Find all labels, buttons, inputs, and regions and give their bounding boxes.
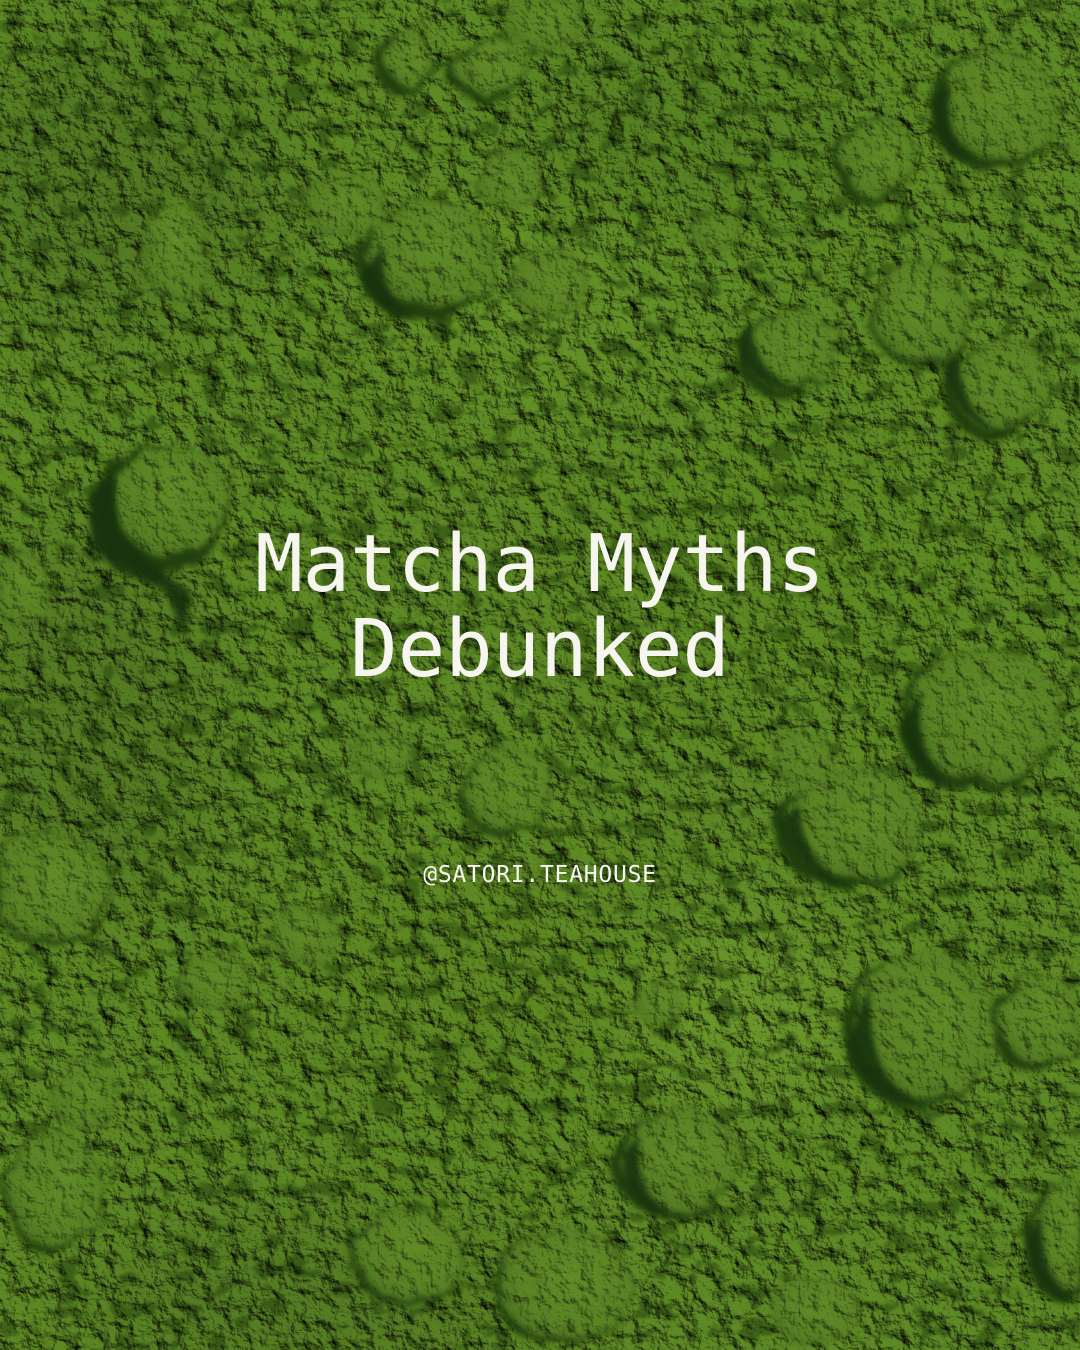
handle: @SATORI.TEAHOUSE: [423, 862, 657, 888]
title line 1: Matcha Myths: [255, 518, 825, 610]
title line 2: Debunked: [350, 603, 730, 695]
title: [255, 518, 825, 695]
